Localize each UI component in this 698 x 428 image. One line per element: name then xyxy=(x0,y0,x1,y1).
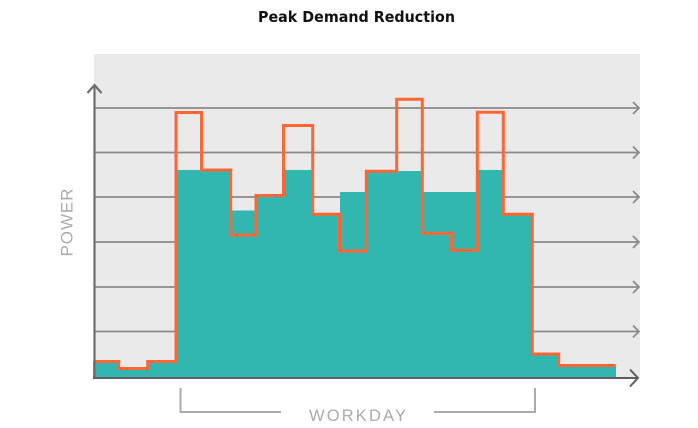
title: Peak Demand Reduction xyxy=(258,8,455,26)
chart background panel xyxy=(94,54,640,378)
horizontal grid lines with arrows xyxy=(95,102,639,338)
teal area: actual power demand xyxy=(93,170,616,378)
y axis with arrow xyxy=(88,85,102,378)
orange line: demand before reduction xyxy=(94,99,616,369)
workday bracket xyxy=(180,388,535,412)
y axis label: POWER xyxy=(58,188,77,256)
x axis with arrow xyxy=(93,370,638,386)
x axis label: WORKDAY xyxy=(309,407,406,425)
